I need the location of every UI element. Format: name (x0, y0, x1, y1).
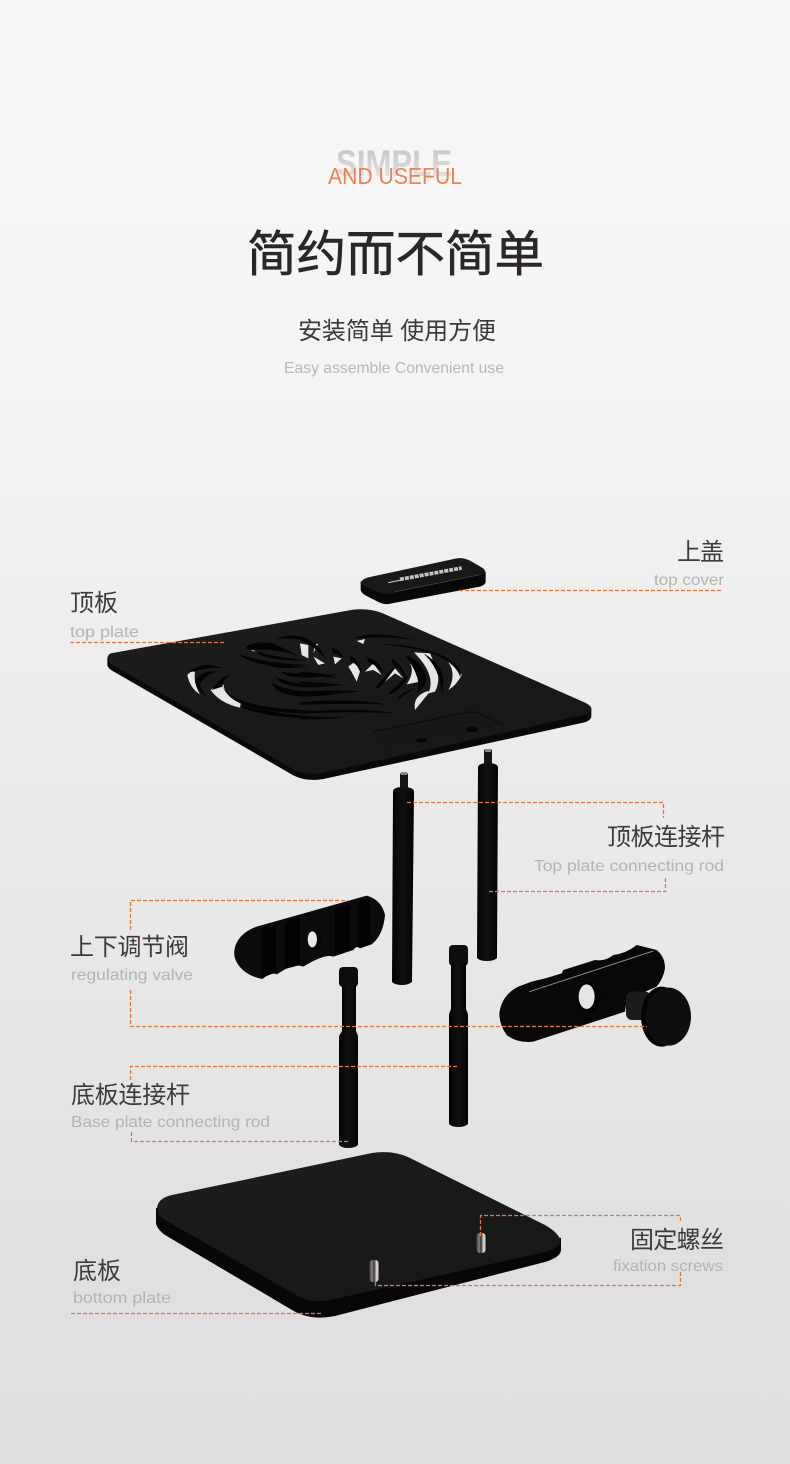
flame cut-out pattern, left half (187, 635, 340, 719)
part: right regulating valve with knob (499, 945, 691, 1047)
label: bottom plate (73, 1258, 171, 1307)
label: regulating valve (70, 934, 193, 984)
label: fixation screws: 固定螺丝 (630, 1227, 724, 1254)
part: base plate connecting rod left (339, 967, 358, 1148)
rectangular recess with two holes (373, 712, 503, 748)
leader: top plate (70, 642, 224, 644)
leader: top cover (459, 590, 722, 592)
leader: bottom plate (71, 1312, 321, 1314)
leader: base rod upper (130, 1066, 459, 1080)
label: base plate connecting rod (71, 1082, 270, 1131)
label: fixation screws: fixation screws (613, 1258, 723, 1275)
fixation screw right (476, 1233, 486, 1253)
part: top plate connecting rod left (392, 772, 414, 985)
part: top cover (361, 558, 486, 604)
label: base plate connecting rod: 底板连接杆 (71, 1082, 190, 1109)
flame cut-out pattern, right half (300, 634, 462, 719)
label: top cover: top cover (654, 572, 725, 589)
leader: regulating valve lower (130, 990, 647, 1026)
label: base plate connecting rod: Base plate connecting rod (71, 1114, 270, 1131)
label: top plate (70, 590, 139, 641)
orange heading AND USEFUL: AND USEFUL (328, 163, 462, 189)
leader: fixation screw lower (376, 1270, 680, 1286)
label: fixation screws (613, 1227, 724, 1275)
part: top plate (107, 609, 592, 780)
label: top plate connecting rod: Top plate connecting rod (534, 858, 724, 875)
label: top plate connecting rod: 顶板连接杆 (607, 824, 725, 851)
label: bottom plate: bottom plate (73, 1290, 171, 1307)
leader: top plate connecting rod upper (407, 802, 664, 818)
subtitle English: Easy assemble Convenient use (284, 360, 504, 377)
header block (247, 143, 544, 377)
valve body (499, 945, 665, 1042)
part: left regulating valve (234, 896, 385, 979)
label: top plate connecting rod (534, 824, 725, 875)
leader: fixation screw upper (480, 1216, 680, 1236)
label: regulating valve: 上下调节阀 (70, 934, 189, 961)
label: top cover: 上盖 (677, 539, 724, 566)
leader: top plate connecting rod lower (489, 877, 666, 892)
leader: base rod lower (132, 1132, 348, 1142)
label: top cover (654, 539, 725, 589)
label: top plate: top plate (70, 624, 139, 641)
label: bottom plate: 底板 (73, 1258, 121, 1285)
label: top plate: 顶板 (70, 590, 118, 617)
part: top plate connecting rod right (477, 749, 498, 961)
threaded screw (626, 992, 651, 1020)
part: base plate connecting rod right (449, 945, 468, 1127)
watermark word SIMPLE: SIMPLE (336, 143, 452, 184)
fixation screw left (369, 1260, 379, 1282)
leader: regulating valve upper (130, 900, 348, 930)
subtitle Chinese: 安装简单 使用方便 (298, 318, 496, 345)
label: regulating valve: regulating valve (71, 967, 193, 984)
part: bottom plate (156, 1152, 561, 1318)
title: 简约而不简单 (247, 228, 544, 282)
knob (641, 987, 691, 1047)
